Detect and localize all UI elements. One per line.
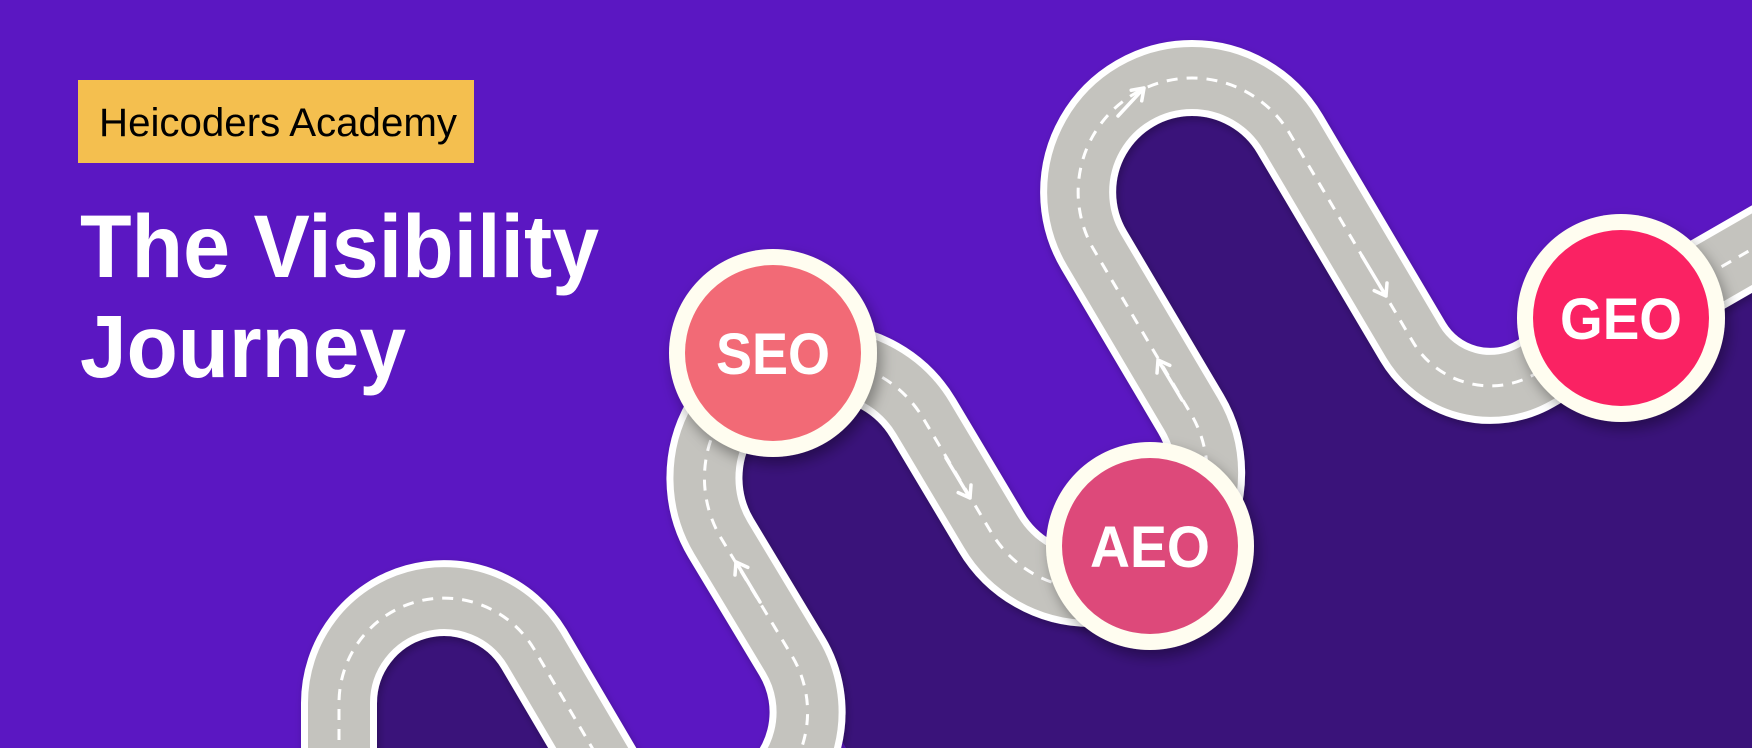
title [80,196,599,396]
badge: AEO [1046,442,1254,650]
arrow: up from AEO [1157,360,1182,400]
brand tag: Heicoders Academy [99,101,457,145]
badge: SEO [669,249,877,457]
arrow: down toward GEO [1362,256,1387,296]
badge: SEO: SEO [716,322,830,387]
dark region: right of road [704,78,1752,748]
title: Journey [80,296,406,396]
badge: GEO [1517,214,1725,422]
brand tag [78,80,474,163]
arrows on road [735,88,1387,602]
title: The Visibility [80,196,599,296]
arrow: top loop [1118,88,1144,116]
dark region: left loop interior [377,636,548,748]
road [339,78,1752,748]
arrow: down toward AEO [946,458,971,498]
arrow: up toward SEO [735,562,760,602]
badge: GEO: GEO [1560,287,1682,352]
badge: AEO: AEO [1090,515,1210,580]
